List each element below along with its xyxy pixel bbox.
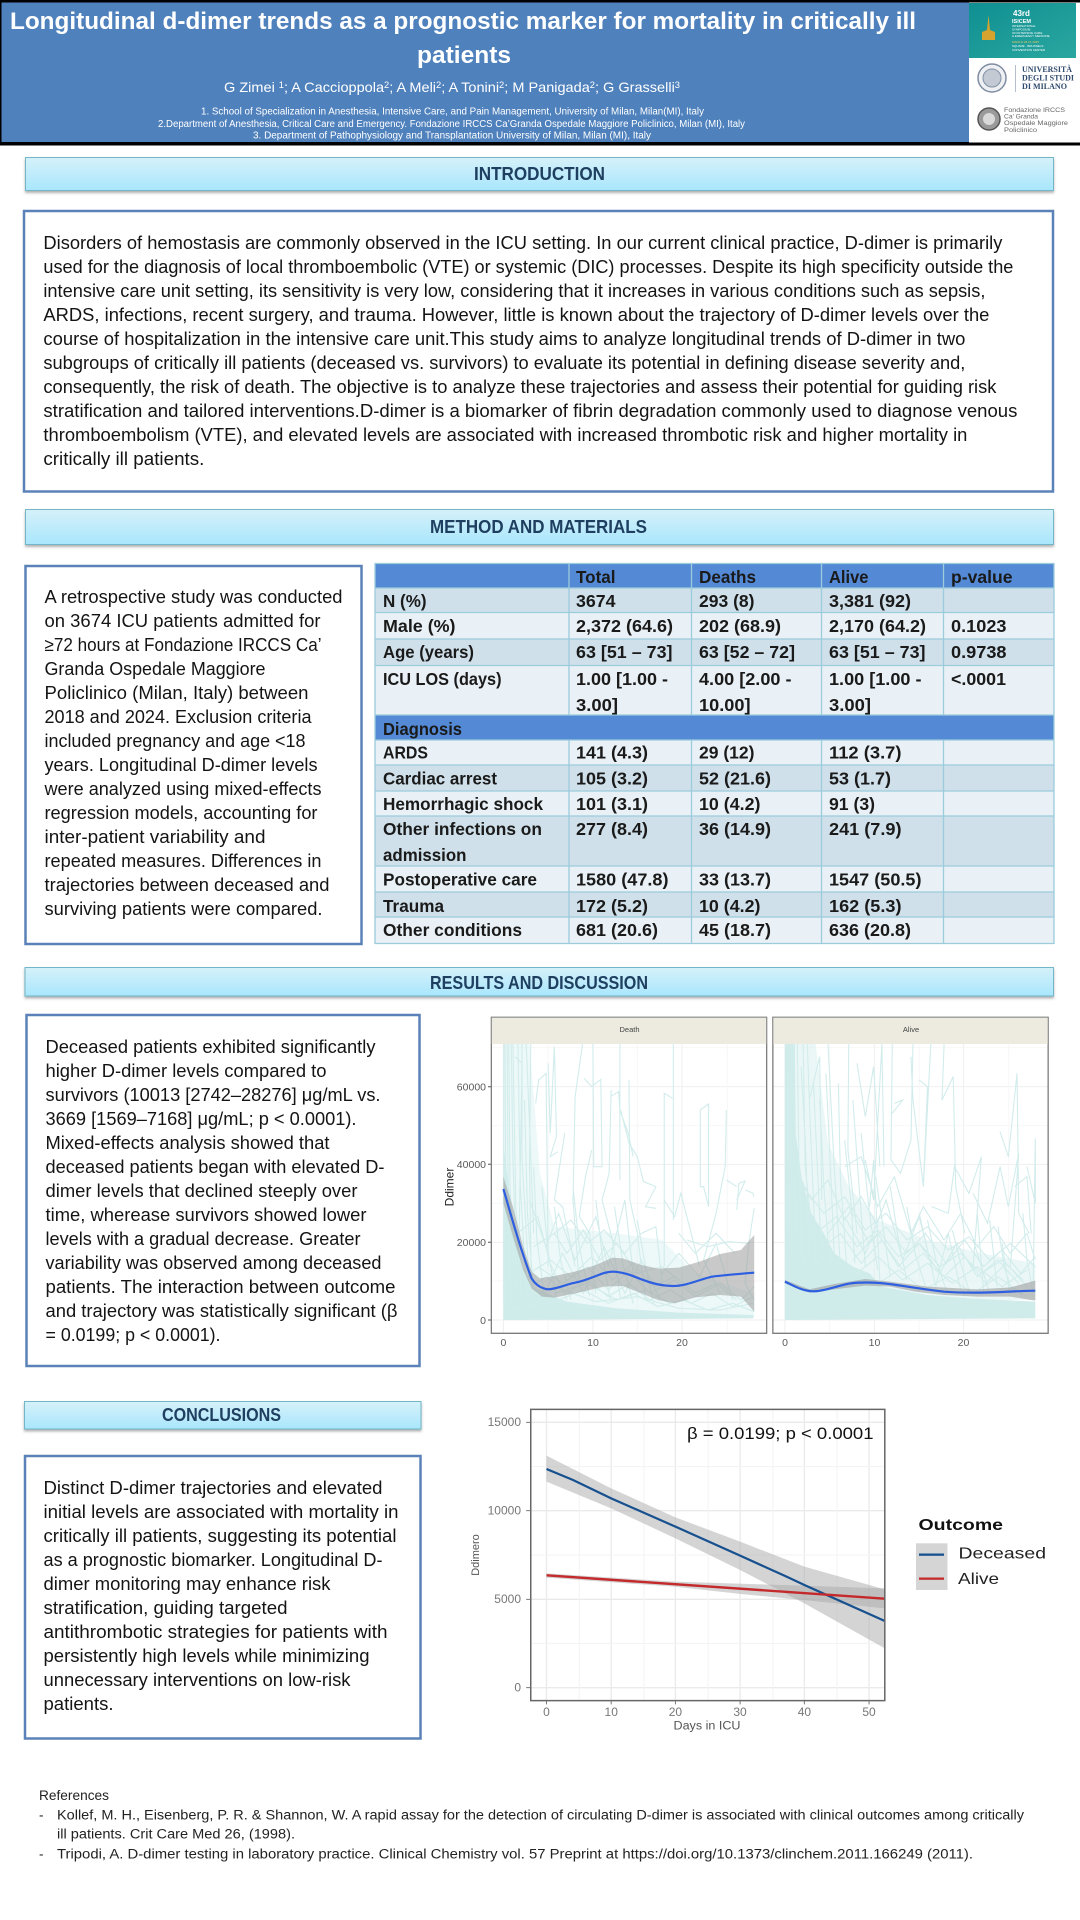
table: patient characteristics: 1580 (47.8) [576,870,668,890]
x axes: 10 [869,1337,880,1349]
table: patient characteristics: 63 [51 – 73] [829,642,926,662]
chart: D-dimer trajectories faceted by outcome [442,1017,1048,1349]
axis labels: 30 [733,1705,747,1719]
panel: methods text: repeated measures. Differences in [44,850,322,871]
panel: introduction text: consequently, the risk of death. The objective is to analyze these trajectories and assess their potential for guiding risk [43,376,997,397]
table: patient characteristics: ICU LOS (days) [383,669,502,689]
authors: 2 [590,80,595,90]
heading: method and materials: METHOD AND MATERIALS [430,516,647,537]
table: patient characteristics: Alive [829,567,869,587]
y axis: 60000 [457,1082,486,1094]
table: patient characteristics: Hemorrhagic shock [383,794,543,814]
table: patient characteristics: 10 (4.2) [699,896,760,916]
panel: results text: variability was observed among deceased [46,1252,382,1273]
references: - [39,1808,44,1822]
logo: Università degli Studi di Milano: DEGLI STUDI [1022,72,1075,82]
authors: ; M Panigada [504,79,590,95]
facet panel: Death [491,1017,767,1333]
table: patient characteristics: 277 (8.4) [576,819,648,839]
table: patient characteristics: Other infections on [383,819,542,839]
table: patient characteristics: 45 (18.7) [699,920,771,940]
logos panel [969,2,1080,142]
title: Longitudinal d-dimer trends as a prognostic marker for mortality in critically ill [10,8,916,35]
authors: 2 [436,80,441,90]
authors: ; G Grasselli [595,79,675,95]
table: patient characteristics: p-value [951,567,1013,587]
heading: results and discussion [25,968,1054,996]
axis labels: 50 [862,1705,876,1719]
authors: 3 [675,80,680,90]
table: patient characteristics: ARDS [383,742,428,762]
panel: results text: survivors (10013 [2742–28276] μg/mL vs. [46,1084,380,1105]
references [39,1788,1024,1862]
confidence band: deceased [546,1456,885,1648]
x axes: 0 [782,1337,788,1349]
table: patient characteristics: 3,381 (92) [829,591,911,611]
panel: methods text: surviving patients were compared. [44,898,322,919]
heading: conclusions [24,1402,421,1429]
table: patient characteristics: 636 (20.8) [829,920,911,940]
legend: outcome [916,1517,1046,1590]
facet panel: Alive [773,1017,1048,1333]
axis labels: 20 [669,1705,682,1719]
panel: conclusions text: initial levels are associated with mortality in [44,1501,398,1522]
panel: methods text: A retrospective study was conducted [44,586,342,607]
panel: methods text: ≥72 hours at Fondazione IRCCS Ca’ [44,634,322,655]
table: patient characteristics: 29 (12) [699,742,754,762]
panel: methods text: trajectories between deceased and [44,874,330,895]
facet labels [619,1025,919,1034]
table: patient characteristics: 162 (5.3) [829,896,902,916]
authors: 2 [499,80,504,90]
authors: G Zimei [224,79,273,95]
panel: conclusions text: dimer monitoring may enhance risk [44,1573,331,1594]
axis labels: 0 [543,1705,550,1719]
table: patient characteristics: Age (years) [383,642,474,662]
panel: results text: dimer levels that declined steeply over [46,1180,358,1201]
table: patient characteristics: 52 (21.6) [699,768,771,788]
y axis [442,1082,491,1327]
heading: introduction [26,158,1054,190]
logo: Università degli Studi di Milano [978,64,1075,92]
x axes: 20 [676,1337,688,1349]
axis labels: Days in ICU [674,1720,740,1732]
panel: introduction text: critically ill patients. [43,448,204,469]
panel: conclusions text: Distinct D-dimer trajectories and elevated [44,1477,382,1498]
panel: introduction text: intensive care unit setting, its sensitivity is very low, considering that it increases in various conditions such as sepsis, [43,280,985,301]
panel: conclusions text: critically ill patients, suggesting its potential [44,1525,396,1546]
chart: linear D-dimer trend by outcome [470,1409,1046,1732]
panel: results text: time, wherease survivors showed lower [46,1204,366,1225]
table: patient characteristics: 10.00] [699,695,750,715]
table: patient characteristics: 172 (5.2) [576,896,648,916]
table: patient characteristics: 0.9738 [951,642,1007,662]
heading: introduction: INTRODUCTION [474,163,605,184]
confidence band: alive [546,1573,885,1608]
affiliations: 2.Department of Anesthesia, Critical Care and Emergency. Fondazione IRCCS Ca’Granda Ospedale Maggiore Policlinico, Milan (MI), Italy [158,119,745,130]
panel: methods text: included pregnancy and age <18 [44,730,306,751]
authors: ; A Caccioppola [284,79,384,95]
heading: method and materials [26,510,1054,544]
trend line: deceased [546,1469,885,1621]
logo: ISICEM: ON INTENSIVE CARE [1012,31,1042,35]
title [10,8,916,69]
axis labels: 0 [514,1680,521,1694]
panel: methods text [26,566,362,944]
authors: 2 [384,80,389,90]
logo: ISICEM: ISICEM [1012,19,1031,25]
references: - [39,1846,44,1862]
panel: results text: Deceased patients exhibited significantly [46,1036,376,1057]
axis labels: Ddimero [470,1534,482,1576]
table: patient characteristics: 1.00 [1.00 - [829,669,922,689]
panel: results text: deceased patients began with elevated D- [46,1156,384,1177]
x axes: 10 [587,1337,599,1349]
axis labels: 5000 [494,1592,521,1606]
table: patient characteristics: 33 (13.7) [699,870,771,890]
panel: results text: = 0.0199; p < 0.0001). [46,1324,220,1345]
annotation: beta and p value: β = 0.0199; p < 0.0001 [687,1424,874,1443]
panel: methods text: 2018 and 2024. Exclusion criteria [44,706,312,727]
y axis: 20000 [457,1237,486,1249]
x axes [500,1337,969,1349]
logo: ISICEM: 43rd [1013,9,1030,18]
table: patient characteristics: Trauma [383,896,444,916]
panel: introduction text: course of hospitalization in the intensive care unit.This study aims to analyze longitudinal trends of D-dimer in two [43,328,965,349]
table: patient characteristics: 3.00] [576,695,618,715]
panel: results text: higher D-dimer levels compared to [46,1060,326,1081]
x axes: 0 [500,1337,506,1349]
panel: results text [26,1015,420,1366]
panel: introduction text: thromboembolism (VTE), and elevated levels are associated with increased thrombotic risk and higher mortality in [43,424,967,445]
table: patient characteristics: Male (%) [383,616,456,636]
x axes: 20 [958,1337,969,1349]
panel: introduction text: stratification and tailored interventions.D-dimer is a biomarker of fibrin degradation commonly used to diagnose venous [43,400,1017,421]
table: patient characteristics: 3674 [576,591,616,611]
panel: conclusions text [25,1456,420,1738]
table: patient characteristics: 53 (1.7) [829,768,891,788]
axis labels: 15000 [488,1415,521,1429]
table: patient characteristics: N (%) [383,591,426,611]
logo: Fondazione IRCCS [978,107,1068,134]
authors: 1 [279,80,284,90]
table: patient characteristics: Diagnosis [383,719,462,739]
table: patient characteristics: Deaths [699,567,756,587]
axis labels: 40 [798,1705,811,1719]
table: patient characteristics: 1547 (50.5) [829,870,922,890]
plot marks [491,1017,1048,1333]
affiliations: 3. Department of Pathophysiology and Transplantation University of Milan, Milan (MI), Italy [253,130,651,142]
authors: ; A Meli [389,79,436,95]
table: patient characteristics: 105 (3.2) [576,768,648,788]
panel: results text: levels with a gradual decrease. Greater [46,1228,360,1249]
panel: introduction text [24,211,1053,492]
table: patient characteristics: Cardiac arrest [383,768,497,788]
logo: ISICEM: CONVENTION CENTER [1012,48,1046,52]
table: patient characteristics: Total [576,567,616,587]
table: patient characteristics: 91 (3) [829,794,875,814]
logo: Università degli Studi di Milano: UNIVERSITÀ [1022,64,1073,74]
panel: results text: 3669 [1569–7168] μg/mL; p < 0.0001). [46,1108,356,1129]
panel: conclusions text: persistently high levels while minimizing [44,1645,370,1666]
title: patients [417,42,511,69]
logo: ISICEM: SQUARE · BRUSSELS [1012,44,1043,48]
table: patient characteristics: admission [383,845,466,865]
table: patient characteristics: 63 [52 – 72] [699,642,795,662]
table: patient characteristics: 293 (8) [699,591,754,611]
table: patient characteristics: 202 (68.9) [699,616,781,636]
table: patient characteristics: 2,170 (64.2) [829,616,926,636]
table: patient characteristics [375,563,1054,944]
trend line: alive [546,1575,885,1599]
logo: Fondazione IRCCS: Policlinico [1004,127,1037,134]
logo: Fondazione IRCCS: Ca’ Granda [1004,114,1038,120]
table: patient characteristics: 0.1023 [951,616,1007,636]
table: patient characteristics: 681 (20.6) [576,920,658,940]
logo: ISICEM: & EMERGENCY MEDICINE [1012,34,1050,38]
table: patient characteristics: Other conditions [383,920,522,940]
facet labels: Death [619,1025,640,1034]
panel: methods text: years. Longitudinal D-dimer levels [44,754,318,775]
panel: introduction text: ARDS, infections, recent surgery, and trauma. However, little is known about the trajectory of D-dimer levels over the [43,304,989,325]
panel: results text: patients. The interaction between outcome [46,1276,396,1297]
y axis: 0 [480,1315,486,1327]
axis labels: 10 [605,1705,618,1719]
panel: introduction text: subgroups of critically ill patients (deceased vs. survivors) to evaluate its potential in defining disease severity and, [43,352,965,373]
heading: results and discussion: RESULTS AND DISCUSSION [430,972,648,993]
logo: Fondazione IRCCS: Fondazione IRCCS [1004,107,1066,114]
y axis: Ddimer [442,1168,456,1206]
axis labels: 10000 [488,1504,521,1518]
logo: ISICEM [969,3,1076,58]
panel: conclusions text: stratification, guiding targeted [44,1597,288,1618]
legend: outcome: Outcome [918,1517,1003,1534]
logo: Fondazione IRCCS: Ospedale Maggiore [1004,120,1068,127]
table: patient characteristics: 112 (3.7) [829,742,902,762]
table: patient characteristics: 3.00] [829,695,871,715]
table: patient characteristics: 10 (4.2) [699,794,760,814]
axis labels [470,1415,876,1732]
logo: ISICEM: SYMPOSIUM [1012,28,1031,32]
references: References [39,1788,109,1803]
table: patient characteristics: Postoperative care [383,870,537,890]
references: Tripodi, A. D-dimer testing in laboratory practice. Clinical Chemistry vol. 57 Preprint at https://doi.org/10.1373/clinchem.2011.166249 (2011). [57,1846,973,1862]
table: patient characteristics: 63 [51 – 73] [576,642,672,662]
legend: outcome: Deceased [958,1546,1046,1562]
table: patient characteristics: 141 (4.3) [576,742,648,762]
panel: methods text: on 3674 ICU patients admitted for [44,610,320,631]
panel: methods text: Granda Ospedale Maggiore [44,658,266,679]
logo: ISICEM: INTERNATIONAL [1012,24,1036,28]
references: ill patients. Crit Care Med 26, (1998). [57,1826,295,1842]
table: patient characteristics: 101 (3.1) [576,794,648,814]
panel: introduction text: Disorders of hemostasis are commonly observed in the ICU setting. In our current clinical practice, D-dimer is primarily [43,232,1003,253]
table: patient characteristics: 36 (14.9) [699,819,771,839]
panel: conclusions text: unnecessary interventions on low-risk [44,1669,351,1690]
table: patient characteristics: 1.00 [1.00 - [576,669,668,689]
panel: methods text: were analyzed using mixed-effects [44,778,321,799]
panel: methods text: Policlinico (Milan, Italy) between [44,682,308,703]
heading: conclusions: CONCLUSIONS [162,1404,281,1425]
table: patient characteristics: <.0001 [951,669,1006,689]
authors: ; A Tonini [441,79,499,95]
plot area [526,1409,885,1704]
legend: outcome: Alive [958,1571,999,1588]
logo: Università degli Studi di Milano: DI MILANO [1022,81,1067,91]
panel: methods text: inter-patient variability and [44,826,266,847]
table: patient characteristics: 4.00 [2.00 - [699,669,792,689]
references: Kollef, M. H., Eisenberg, P. R. & Shannon, W. A rapid assay for the detection of circulating D-dimer is associated with clinical outcomes among critically [57,1808,1024,1822]
panel: conclusions text: patients. [44,1693,114,1714]
panel: methods text: regression models, accounting for [44,802,318,823]
panel: results text: Mixed-effects analysis showed that [46,1132,330,1153]
panel: introduction text: used for the diagnosis of local thromboembolic (VTE) or systemic (DIC) processes. Despite its high specificity outside the [43,256,1013,277]
facet labels: Alive [903,1025,919,1034]
logo: ISICEM: MARCH 18-21 2025 [1012,40,1039,44]
panel: conclusions text: antithrombotic strategies for patients with [44,1621,387,1642]
affiliations: 1. School of Specialization in Anesthesia, Intensive Care, and Pain Management, University of Milan, Milan(MI), Italy [201,106,704,118]
y axis: 40000 [457,1159,486,1171]
panel: results text: and trajectory was statistically significant (β [46,1300,398,1321]
affiliations [158,106,745,142]
panel: conclusions text: as a prognostic biomarker. Longitudinal D- [44,1549,382,1570]
table: patient characteristics: 2,372 (64.6) [576,616,673,636]
table: patient characteristics: 241 (7.9) [829,819,902,839]
header banner [0,0,1080,146]
